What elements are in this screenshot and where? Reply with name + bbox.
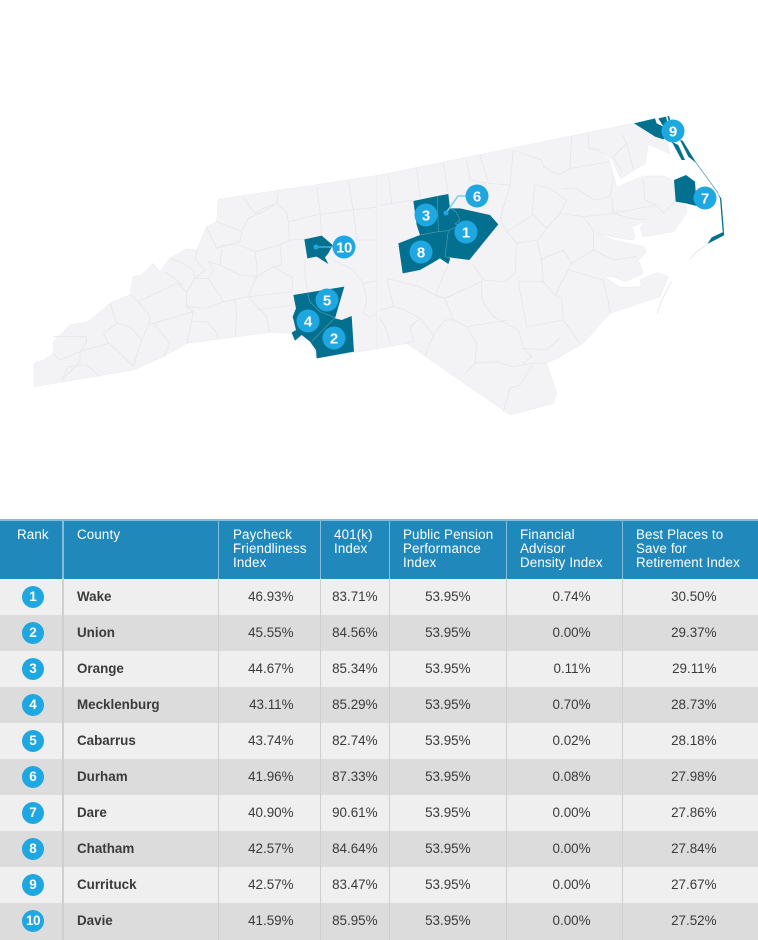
row 8: Chatham bbox=[0, 831, 758, 867]
table header: Index bbox=[403, 555, 436, 570]
map: North Carolina counties bbox=[34, 116, 724, 415]
table header: Paycheck bbox=[233, 527, 292, 542]
badge 8 bbox=[410, 240, 432, 264]
table header: Advisor bbox=[520, 541, 566, 556]
badge 2: 2 bbox=[330, 330, 338, 348]
table header: County bbox=[77, 527, 120, 542]
row 4: Mecklenburg: 28.73% bbox=[671, 697, 716, 712]
badge 4 bbox=[296, 310, 320, 332]
row 5: Cabarrus: 43.74% bbox=[248, 733, 294, 748]
row 7: Dare bbox=[0, 795, 758, 831]
row 7: Dare: Dare bbox=[77, 805, 107, 820]
row 2: Union: 53.95% bbox=[425, 625, 470, 640]
row 3: Orange: 3 bbox=[29, 661, 37, 676]
highlighted counties: Orange, Durham, Wake, Chatham, Dare, Currituck bbox=[398, 116, 724, 273]
badge 8: 8 bbox=[417, 244, 425, 262]
row 1: Wake: Wake bbox=[77, 588, 111, 604]
table header: Index bbox=[233, 555, 266, 570]
row 1: Wake: 1 bbox=[29, 588, 37, 604]
row 4: Mecklenburg: 43.11% bbox=[249, 697, 294, 712]
row 6: Durham: 0.08% bbox=[553, 769, 590, 784]
row 8: Chatham: 8 bbox=[29, 841, 37, 856]
row 9: Currituck: 83.47% bbox=[332, 877, 378, 892]
row 4: Mecklenburg: 0.70% bbox=[553, 697, 590, 712]
row 2: Union: 0.00% bbox=[553, 625, 590, 640]
row 4: Mecklenburg bbox=[0, 687, 758, 723]
row 10: Davie: 85.95% bbox=[332, 913, 378, 928]
row 9: Currituck: 53.95% bbox=[425, 877, 470, 892]
badge 4: 4 bbox=[304, 314, 313, 330]
row 9: Currituck: Currituck bbox=[77, 877, 137, 892]
table header: Retirement Index bbox=[636, 555, 740, 570]
row 1: Wake: 83.71% bbox=[332, 588, 378, 604]
row 6: Durham: 27.98% bbox=[671, 769, 716, 784]
row 5: Cabarrus: 28.18% bbox=[671, 733, 716, 748]
row 8: Chatham: 27.84% bbox=[671, 841, 716, 856]
highlighted counties: Cabarrus, Mecklenburg, Union, Davie bbox=[292, 236, 354, 358]
badge 6 bbox=[466, 184, 488, 208]
counties: Orange, Durham, Wake, Chatham bbox=[398, 194, 498, 273]
row 2: Union: 45.55% bbox=[248, 625, 294, 640]
row 5: Cabarrus bbox=[0, 723, 758, 759]
row 8: Chatham: 42.57% bbox=[248, 841, 294, 856]
table header: 401(k) bbox=[334, 527, 373, 542]
table header: Public Pension bbox=[403, 527, 493, 542]
row 7: Dare: 53.95% bbox=[425, 805, 470, 820]
row 10: Davie bbox=[0, 903, 758, 940]
row 1: Wake: 53.95% bbox=[425, 588, 470, 604]
row 10: Davie: 10 bbox=[26, 913, 40, 928]
row 6: Durham: Durham bbox=[77, 769, 128, 784]
row 3: Orange: Orange bbox=[77, 661, 124, 676]
county: Dare bbox=[674, 175, 724, 244]
badge 1 bbox=[454, 220, 478, 244]
row 9: Currituck: 27.67% bbox=[671, 877, 716, 892]
row 4: Mecklenburg: 53.95% bbox=[425, 697, 470, 712]
row 3: Orange: 53.95% bbox=[425, 661, 470, 676]
table header: Financial bbox=[520, 527, 575, 542]
county: Currituck bbox=[634, 116, 718, 193]
row 2: Union: 2 bbox=[29, 625, 37, 640]
row 3: Orange: 85.34% bbox=[332, 661, 378, 676]
row 2: Union: 29.37% bbox=[671, 625, 716, 640]
row 3: Orange: 0.11% bbox=[554, 661, 590, 676]
row 7: Dare: 27.86% bbox=[671, 805, 716, 820]
row 9: Currituck bbox=[0, 867, 758, 903]
row 5: Cabarrus: 82.74% bbox=[332, 733, 378, 748]
row 7: Dare: 7 bbox=[29, 805, 37, 820]
row 7: Dare: 90.61% bbox=[332, 805, 378, 820]
row 1: Wake: 30.50% bbox=[671, 588, 716, 604]
badge 1: 1 bbox=[462, 224, 470, 242]
badge 3: 3 bbox=[422, 208, 430, 224]
leader line: Davie bbox=[314, 244, 344, 250]
row 9: Currituck: 42.57% bbox=[248, 877, 294, 892]
row 8: Chatham: 53.95% bbox=[425, 841, 470, 856]
table header: Rank bbox=[17, 527, 49, 542]
badge 3 bbox=[414, 204, 438, 226]
row 9: Currituck: 9 bbox=[29, 877, 37, 892]
row 10: Davie: 53.95% bbox=[425, 913, 470, 928]
row 1: Wake: 0.74% bbox=[553, 588, 590, 604]
row 2: Union: 84.56% bbox=[332, 625, 378, 640]
rank badges on map bbox=[296, 120, 716, 350]
badge 9: 9 bbox=[669, 124, 677, 140]
counties: Cabarrus, Mecklenburg, Union bbox=[292, 287, 354, 358]
row 2: Union bbox=[0, 615, 758, 651]
row 3: Orange: 44.67% bbox=[248, 661, 294, 676]
table header: Save for bbox=[636, 541, 687, 556]
table header bbox=[0, 519, 758, 579]
row 4: Mecklenburg: Mecklenburg bbox=[77, 697, 160, 712]
table header: Best Places to bbox=[636, 527, 723, 542]
badge 10: 10 bbox=[336, 240, 352, 256]
row 1: Wake: 46.93% bbox=[248, 588, 294, 604]
row 7: Dare: 40.90% bbox=[248, 805, 294, 820]
row 8: Chatham: Chatham bbox=[77, 841, 134, 856]
row 5: Cabarrus: 5 bbox=[29, 733, 37, 748]
row 9: Currituck: 0.00% bbox=[553, 877, 590, 892]
row 10: Davie: Davie bbox=[77, 913, 113, 928]
western North Carolina counties bbox=[34, 175, 383, 387]
row 6: Durham: 53.95% bbox=[425, 769, 470, 784]
row 4: Mecklenburg: 85.29% bbox=[332, 697, 378, 712]
row 10: Davie: 0.00% bbox=[553, 913, 590, 928]
badge 7: 7 bbox=[701, 190, 709, 208]
row 6: Durham: 6 bbox=[29, 769, 37, 784]
row 6: Durham: 41.96% bbox=[248, 769, 294, 784]
table header: Performance bbox=[403, 541, 481, 556]
badge 5 bbox=[316, 288, 338, 312]
county: Davie bbox=[304, 236, 333, 264]
badge 9 bbox=[662, 120, 684, 142]
row 2: Union: Union bbox=[77, 625, 115, 640]
row 1: Wake bbox=[0, 578, 758, 615]
badge 7 bbox=[694, 186, 716, 210]
barrier islands bbox=[657, 244, 707, 314]
row 7: Dare: 0.00% bbox=[553, 805, 590, 820]
badge 2 bbox=[322, 326, 346, 350]
row 10: Davie: 41.59% bbox=[248, 913, 294, 928]
row 5: Cabarrus: 53.95% bbox=[425, 733, 470, 748]
row 6: Durham bbox=[0, 759, 758, 795]
row 5: Cabarrus: 0.02% bbox=[553, 733, 590, 748]
table header: Density Index bbox=[520, 555, 603, 570]
leader line: Durham bbox=[444, 196, 477, 216]
row 6: Durham: 87.33% bbox=[332, 769, 378, 784]
badge 10 bbox=[332, 236, 356, 258]
row 8: Chatham: 84.64% bbox=[332, 841, 378, 856]
ranking table bbox=[0, 519, 758, 940]
row 10: Davie: 27.52% bbox=[671, 913, 716, 928]
badge 6: 6 bbox=[473, 188, 481, 206]
row 8: Chatham: 0.00% bbox=[553, 841, 590, 856]
table header: Friendliness bbox=[233, 541, 307, 556]
row 3: Orange bbox=[0, 651, 758, 687]
badge 5: 5 bbox=[323, 292, 331, 310]
row 3: Orange: 29.11% bbox=[672, 661, 716, 676]
eastern North Carolina counties bbox=[377, 123, 707, 415]
row 5: Cabarrus: Cabarrus bbox=[77, 733, 136, 748]
row 4: Mecklenburg: 4 bbox=[29, 697, 37, 712]
table header: Index bbox=[334, 541, 367, 556]
